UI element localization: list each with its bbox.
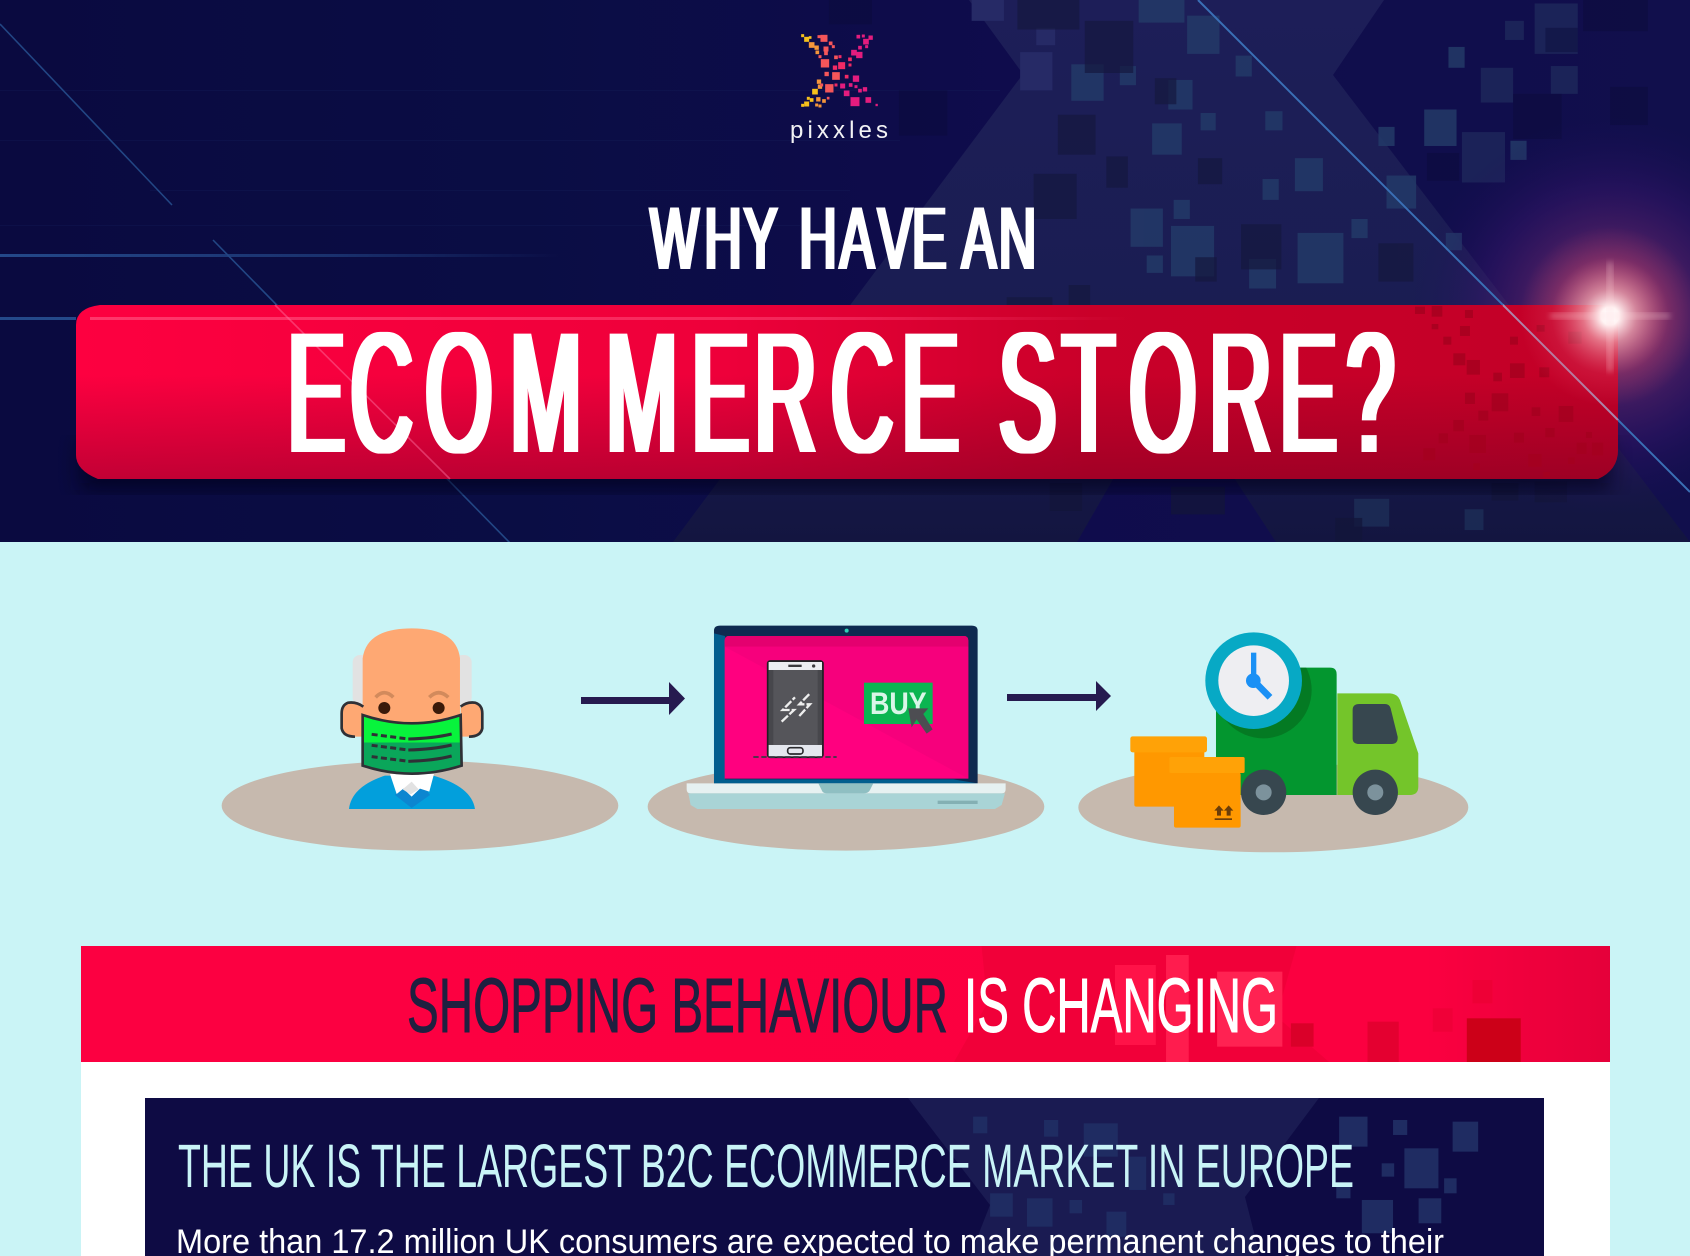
banner shadow	[80, 440, 1610, 490]
lens flare	[1520, 226, 1690, 406]
icon: phone	[753, 661, 837, 757]
logo mark: pixel X	[802, 35, 877, 107]
logo: pixxles	[790, 35, 888, 144]
icon: boxes	[1130, 736, 1245, 828]
icon: masked person	[222, 628, 618, 851]
section heading band	[81, 946, 1610, 1063]
section card: white panel	[81, 1062, 1610, 1256]
heading text: SHOPPING BEHAVIOUR	[407, 963, 948, 1049]
arrow: laptop to truck	[1007, 681, 1111, 711]
icon: delivery truck with clock and boxes	[1078, 632, 1468, 852]
heading text: IS CHANGING	[964, 963, 1278, 1049]
title: why have an: WHY HAVE AN	[650, 189, 1036, 289]
red title banner	[76, 305, 1618, 479]
icon: clock	[1205, 632, 1302, 729]
icon: buy button: BUY	[870, 685, 927, 721]
icon: laptop with buy button	[648, 626, 1044, 851]
header banner	[0, 0, 1690, 545]
icon: buy button	[864, 683, 933, 734]
arrow: person to laptop	[581, 682, 685, 715]
panel: UK market	[145, 1098, 1544, 1256]
title: ecommerce store: ECOMMERCE STORE?	[288, 296, 1394, 489]
logo wordmark: pixxles	[790, 117, 888, 144]
